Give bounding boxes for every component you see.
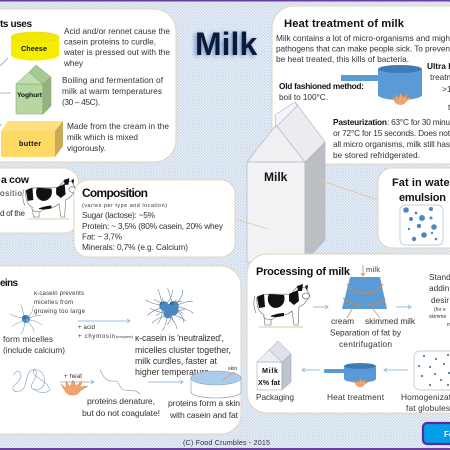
text: kappa casein note: κ-casein prevents (34, 291, 84, 297)
arrow: to packaging (302, 368, 320, 372)
text: neutralized: higher temperature (135, 367, 209, 377)
text: old fashioned method: Old fashioned method: (279, 81, 364, 91)
icon: heat treatment pan (324, 363, 376, 387)
label: packaging: Packaging (256, 392, 294, 402)
arrows to products (0, 58, 11, 126)
text: pasteurization: : 63°C for 30 minu (387, 117, 450, 127)
text: neutralized: micelles cluster together, (135, 345, 231, 355)
text: cheese: Acid and/or rennet cause the (64, 26, 170, 36)
text: composition values: Sugar (lactose): ~5% (82, 210, 156, 220)
title: Milk (193, 27, 255, 63)
text: pasteurization: or 72°C for 15 seconds. Does not (333, 128, 450, 138)
title: Milk (195, 26, 257, 62)
text: cheese: water is pressed out with the (63, 47, 170, 57)
arrow: cow to centrifuge (313, 305, 328, 309)
icon: flame (61, 380, 88, 395)
icon: micelle (10, 305, 42, 334)
heading: heat treatment: Heat treatment of milk (284, 18, 405, 30)
icon: milk package (257, 341, 291, 390)
button (423, 423, 450, 444)
text: butter: milk which is mixed (67, 132, 138, 142)
text: intro: Milk contains a lot of micro-organisms and migh (276, 33, 450, 43)
icon: cow (254, 284, 310, 327)
text: cheese: whey (63, 58, 84, 68)
icon: milk package: X% fat (258, 378, 281, 387)
text: standardisation: addin (429, 283, 450, 293)
text: standardisation: desir (431, 295, 449, 305)
text: centrifuge labels: Separation of fat by (330, 328, 402, 338)
text: form micelles: form micelles (3, 334, 53, 344)
text: cow: ositio (0, 188, 22, 198)
text: acid and chymosin: (enzyme) (116, 334, 134, 339)
panel: composition (74, 180, 235, 257)
text: cow: d of the (0, 208, 25, 218)
heading: uses: ts uses (0, 19, 32, 30)
text: yoghurt: milk at warm temperatures (62, 86, 162, 96)
panel: processing of milk (247, 254, 450, 413)
text: homogenization: fat globules (406, 403, 450, 413)
text: composition values: Fat: ~ 3,7% (82, 232, 123, 242)
arrow: heat step (60, 380, 94, 384)
arrow: to heat treatment (384, 368, 408, 372)
icon: pan with skin (191, 371, 241, 398)
icon: pan on flame (341, 65, 422, 105)
text: pasteurization: be stored refridgerated. (333, 150, 420, 160)
heading: composition: Composition (82, 186, 148, 200)
text: pasteurization: Pasteurization (333, 117, 387, 127)
text: proteins denature: proteins denature, (87, 396, 155, 406)
panel: fat in water emulsion (378, 168, 450, 248)
icon: butter: butter (19, 139, 41, 148)
icon: cow (23, 178, 76, 219)
text: acid and chymosin: + chymosin (78, 334, 115, 340)
text: cheese: casein proteins to curdle, (64, 36, 156, 46)
text: kappa casein note: growing too large (34, 309, 86, 315)
text: proteins denature: but do not coagulate! (82, 408, 160, 418)
text: neutralized: κ-casein is 'neutralized', (135, 333, 224, 343)
illustration: milk carton (247, 102, 325, 262)
connector lines (235, 180, 378, 229)
label: skin: skin (228, 366, 237, 372)
label: heat treatment: Heat treatment (327, 392, 385, 402)
text: butter: Made from the cream in the (67, 121, 169, 131)
label: milk input: milk (366, 265, 380, 274)
text: standardisation: (for e (434, 307, 446, 313)
heading: proteins: eins (0, 278, 18, 289)
text: proteins form a skin: with casein and fat (169, 410, 239, 420)
text: homogenization: Homogenizat (401, 392, 450, 402)
text: centrifuge labels: skimmed milk (365, 316, 416, 326)
text: intro: be heat treated, this kills of bacteria. (276, 54, 409, 64)
heading: processing: Processing of milk (256, 266, 351, 278)
panel: its uses (0, 9, 176, 162)
icon: yoghurt carton (16, 65, 51, 114)
label: carton: Milk (264, 170, 288, 184)
icon: yoghurt carton: Yoghurt (17, 92, 43, 99)
arrow: centrifuge to standardise (396, 305, 411, 309)
text: intro: pathogens that can make people sick. To preven (276, 44, 450, 54)
panel: caseins and proteins (0, 266, 241, 434)
icon: centrifuge (342, 277, 387, 318)
text: composition values: (varies per type and location) (82, 203, 167, 209)
icon: micelle cluster (145, 288, 194, 331)
icon: cheese: Cheese (21, 44, 47, 53)
chart: emulsion droplets (400, 205, 443, 245)
panel: heat treatment (272, 6, 450, 164)
arrow: acid step (78, 319, 130, 323)
label: heat: + heat (64, 373, 82, 380)
arrow: to skin (148, 380, 183, 384)
icon: cheese (11, 32, 59, 60)
text: butter: vigorously. (67, 143, 106, 153)
text: standardisation: skimme (429, 314, 446, 320)
chart: homogenized droplets (414, 351, 450, 390)
text: yoghurt: (30 – 45C). (62, 97, 100, 107)
text: acid and chymosin: + acid (78, 325, 95, 331)
text: centrifuge labels: cream (331, 316, 354, 326)
icon: folded protein (13, 369, 50, 393)
text: composition values: Minerals: 0,7% (e.g. Calcium) (82, 242, 188, 252)
text: proteins form a skin: proteins form a skin (168, 398, 240, 408)
icon: denatured protein (100, 369, 140, 394)
text: composition values: Protein: ~ 3,5% (80% casein, 20% whey (82, 221, 224, 231)
icon: milk package: Milk (262, 366, 278, 375)
heading: cow: a cow (1, 174, 30, 186)
credit: (C) Food Crumbles - 2015 (183, 438, 270, 447)
text: kappa casein note: micelles from (34, 300, 73, 306)
heading: fat in water emulsion: emulsion (399, 192, 446, 204)
text: form micelles: (include calcium) (3, 345, 65, 355)
panel: cow (0, 168, 79, 233)
text: yoghurt: Boiling and fermentation of (62, 75, 164, 85)
text: old fashioned method: boil to 100°C. (279, 92, 328, 102)
arrow: milk input (361, 265, 365, 276)
text: neutralized: milk curdles, faster at (135, 356, 218, 366)
text: centrifuge labels: centrifugation (339, 339, 392, 349)
icon: butter (1, 121, 63, 157)
text: pasteurization: all micro organisms, milk still has (333, 139, 450, 149)
